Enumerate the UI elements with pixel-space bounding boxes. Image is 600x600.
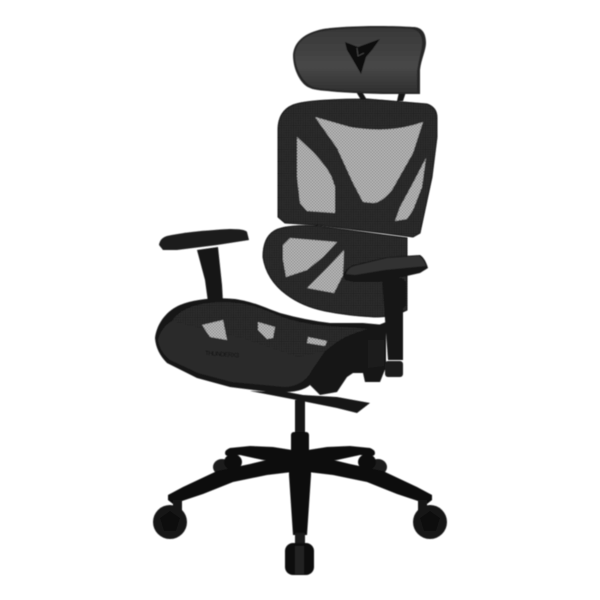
- headrest: [293, 26, 426, 94]
- front caster: center: [285, 533, 314, 575]
- front right leg: [308, 452, 432, 504]
- seat adjustment lever: [250, 391, 370, 413]
- backrest mesh opening: center: [315, 117, 423, 203]
- front caster: left: [153, 500, 187, 539]
- front caster: right: [413, 500, 447, 539]
- gas cylinder: [291, 400, 309, 462]
- arm post: [197, 247, 223, 302]
- backrest: [278, 99, 437, 237]
- front left leg: [168, 452, 292, 504]
- rear caster: left: [213, 454, 242, 475]
- rear caster: right: [358, 454, 387, 475]
- rear left leg: [225, 446, 292, 464]
- star base: [168, 446, 432, 535]
- front leg: [289, 458, 311, 535]
- seat: [155, 298, 385, 392]
- seat mesh opening: left: [202, 320, 227, 340]
- right armrest: [343, 255, 428, 282]
- lumbar mesh opening: upper: [283, 238, 337, 277]
- lumbar mesh panel: [263, 226, 407, 317]
- seat brand text: THUNDERX3: [205, 350, 240, 359]
- arm pad: [159, 229, 249, 250]
- under-seat mechanism: [310, 322, 386, 395]
- lumbar mesh opening: lower: [307, 250, 344, 293]
- headrest support posts: [355, 90, 406, 101]
- rear right leg: [308, 446, 375, 464]
- backrest mesh opening: left: [297, 137, 335, 213]
- seat mesh opening: right: [307, 337, 327, 346]
- icon: brand logo: [345, 39, 380, 74]
- seat mesh opening: center: [258, 322, 275, 339]
- right arm post: [382, 278, 406, 377]
- left armrest: [159, 229, 249, 302]
- backrest mesh opening: right: [395, 158, 426, 221]
